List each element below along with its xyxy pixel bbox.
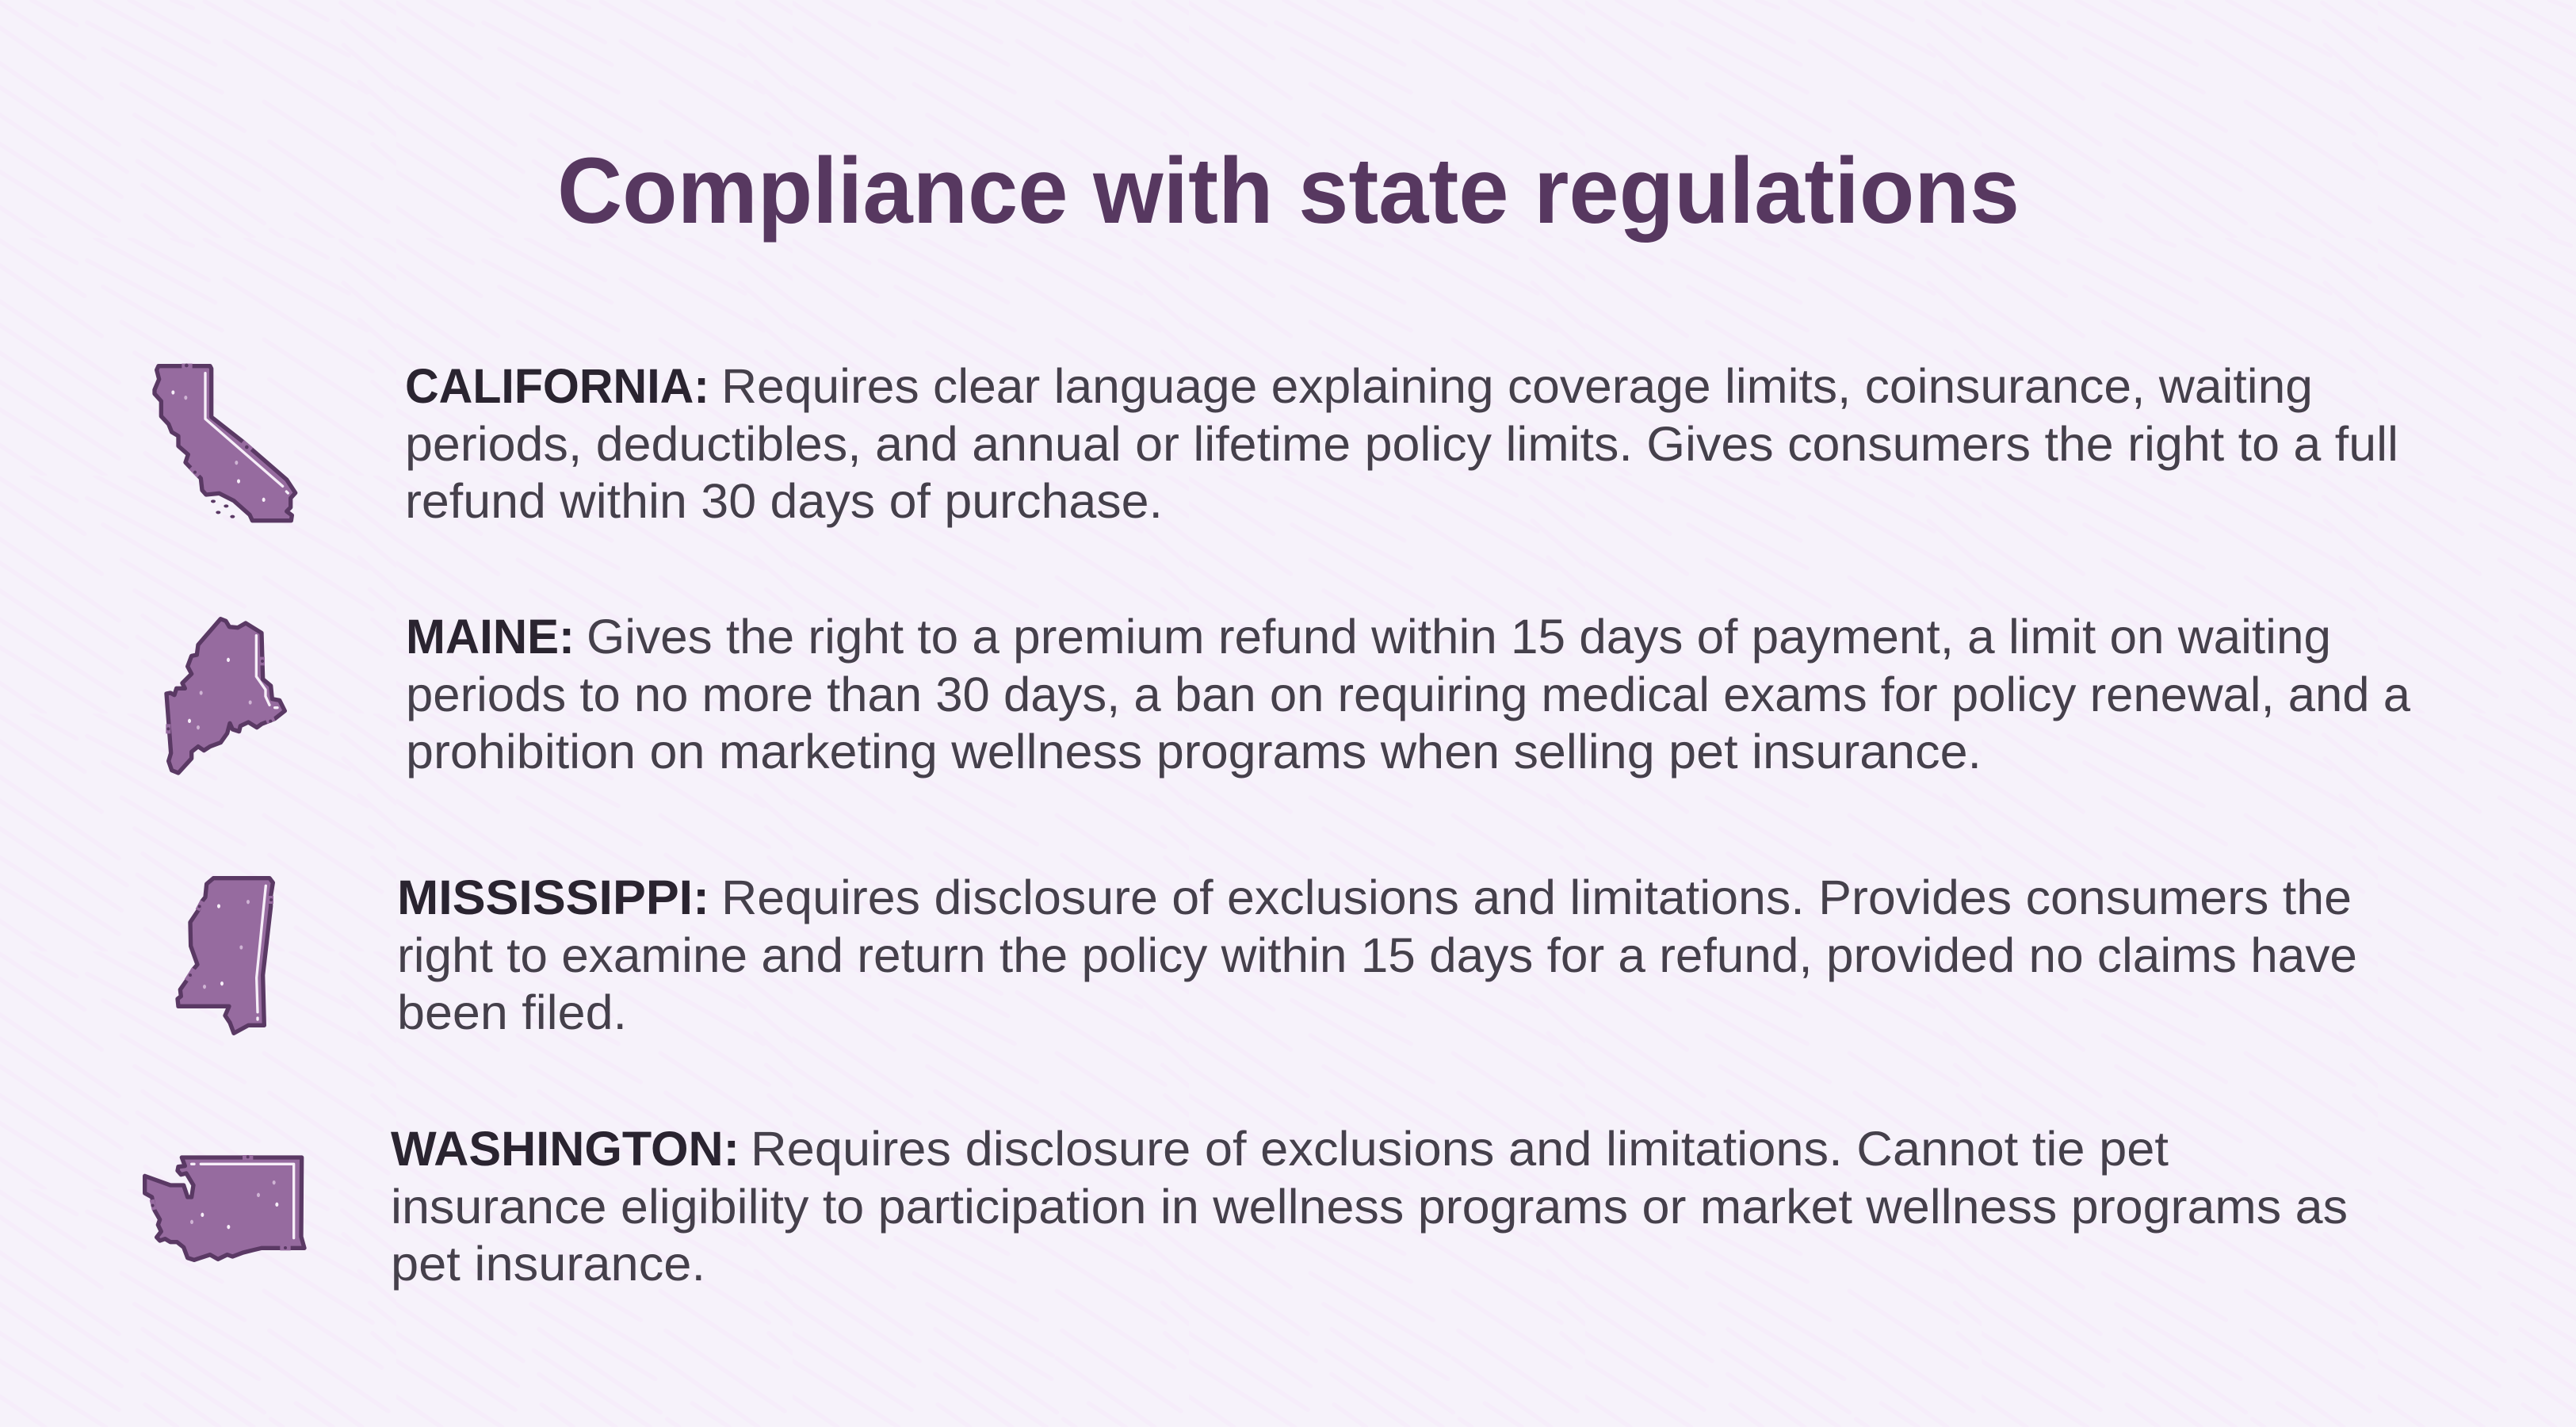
text block: Mississippi: Requires disclosure of exclusions and limitations. Provides consumers the	[721, 870, 2352, 924]
text block: Maine: MAINE:	[406, 610, 575, 664]
icon: Maine state	[166, 619, 285, 773]
text block: Washington: pet insurance.	[391, 1237, 705, 1291]
text block: Washington: insurance eligibility to participation in wellness programs or market wellness programs as	[391, 1180, 2348, 1234]
text block: Maine: periods to no more than 30 days, a ban on requiring medical exams for policy renewal, and a	[406, 668, 2410, 721]
text block: Mississippi	[397, 870, 2357, 1039]
icon: Washington state	[145, 1155, 304, 1260]
text block: California: Requires clear language explaining coverage limits, coinsurance, waiting	[721, 359, 2313, 413]
text block: Mississippi: MISSISSIPPI:	[397, 870, 709, 924]
text block: California	[405, 359, 2398, 528]
text block: California: refund within 30 days of purchase.	[405, 474, 1163, 528]
title: Compliance with state regulations	[557, 139, 2020, 243]
text block: Mississippi: been filed.	[397, 985, 627, 1039]
text block: California: CALIFORNIA:	[405, 359, 709, 413]
text block: Washington: WASHINGTON:	[391, 1122, 740, 1176]
icon: Mississippi state	[178, 878, 273, 1033]
text block: Mississippi: right to examine and return the policy within 15 days for a refund, provided no claims have	[397, 928, 2357, 982]
icon: California state	[155, 364, 296, 521]
text block: Washington: Requires disclosure of exclusions and limitations. Cannot tie pet	[751, 1122, 2169, 1176]
text block: Maine: prohibition on marketing wellness programs when selling pet insurance.	[406, 725, 1982, 779]
text block: California: periods, deductibles, and annual or lifetime policy limits. Gives consumers the right to a full	[405, 417, 2398, 471]
text block: Washington	[391, 1122, 2348, 1291]
text block: Maine: Gives the right to a premium refund within 15 days of payment, a limit on waiting	[587, 610, 2331, 664]
text block: Maine	[406, 610, 2410, 779]
